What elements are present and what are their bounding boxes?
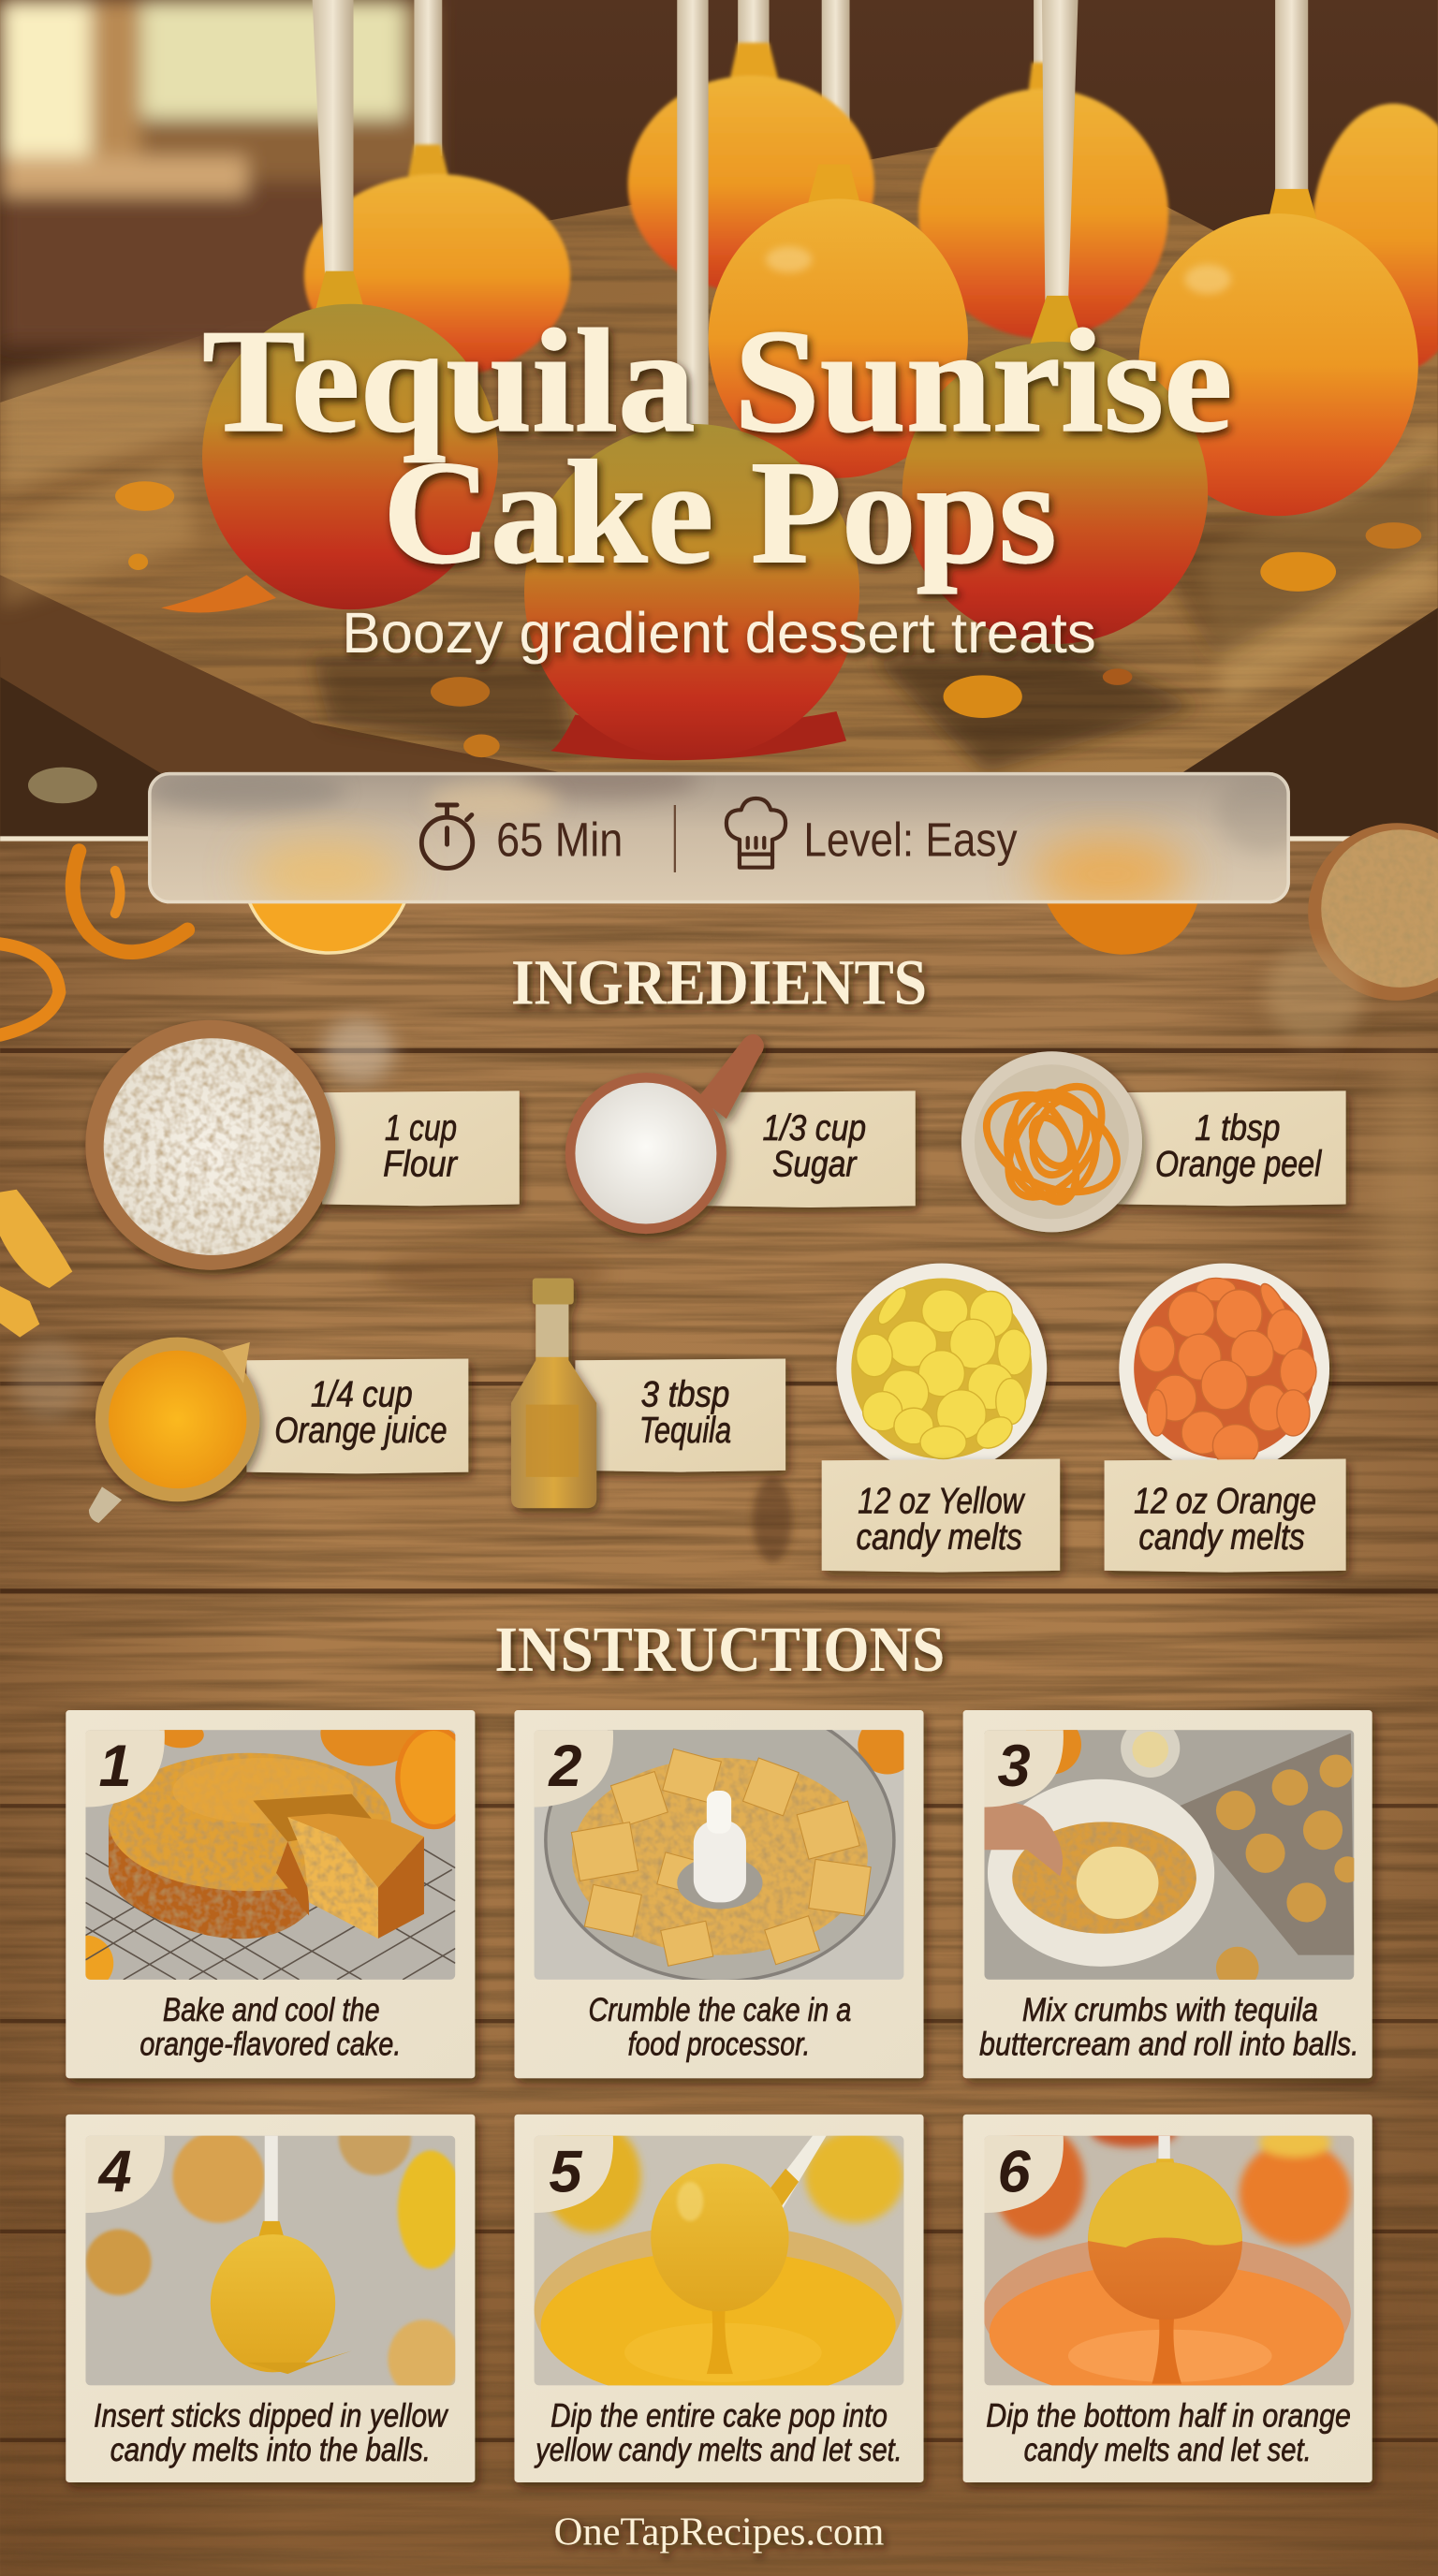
step 4 caption: Insert sticks dipped in yellow: [94, 2397, 449, 2434]
number badge 6: 6: [997, 2139, 1031, 2204]
step 2 photo: crumbs in food processor: [535, 1699, 917, 1982]
icon: tequila bottle: [511, 1278, 596, 1508]
icon: orange melts bowl: [1119, 1264, 1329, 1473]
step 1 caption: [139, 1992, 401, 2063]
step 6 caption: candy melts and let set.: [1024, 2432, 1312, 2468]
background sticks: [414, 0, 1308, 198]
number badge 5: [535, 2136, 613, 2213]
ingredient: flour: 1 cup: [385, 1108, 457, 1149]
number badge 1: [85, 1730, 165, 1808]
number badge 4: [85, 2136, 165, 2213]
step 5 photo: dip in yellow melts: [535, 2121, 903, 2402]
heading: instructions: INSTRUCTIONS: [494, 1614, 945, 1685]
ingredient: flour: Flour: [383, 1145, 459, 1185]
step 6 photo: dip in orange melts: [983, 2117, 1354, 2402]
wood table background: [0, 829, 1438, 2576]
step 3 caption: Mix crumbs with tequila: [1022, 1992, 1318, 2028]
icon: sugar scoop: [565, 1034, 764, 1234]
paper label: tequila: [575, 1358, 785, 1472]
number badge 2: 2: [548, 1734, 581, 1799]
ingredient: orange candy melts: candy melts: [1138, 1517, 1305, 1558]
step card 2: [514, 1699, 924, 2078]
step card 6: [963, 2115, 1372, 2482]
ingredient: orange juice: Orange juice: [274, 1411, 448, 1451]
number badge 6: [984, 2136, 1064, 2213]
step 6 caption: Dip the bottom half in orange: [986, 2397, 1351, 2434]
number badge 2: [535, 1730, 613, 1808]
ingredient: orange juice: [89, 1338, 468, 1523]
title: Cake Pops: [383, 431, 1057, 594]
footer website: OneTapRecipes.com: [554, 2510, 885, 2554]
ingredient: orange peel: Orange peel: [1155, 1145, 1322, 1185]
level label: Level: Easy: [803, 812, 1018, 866]
icon: chef hat: [726, 798, 785, 868]
ingredient: orange juice: 1/4 cup: [311, 1374, 413, 1414]
middle row cake pops: [709, 165, 1418, 516]
ingredient: tequila: 3 tbsp: [641, 1374, 729, 1414]
paper label: sugar: [707, 1090, 916, 1208]
back row cake pops: [304, 43, 1438, 378]
ingredient: flour: [85, 1020, 520, 1270]
icon: stopwatch: [421, 805, 473, 869]
orange garnishes and sugar bowl along top of table: [0, 823, 1438, 1419]
ingredient: orange peel: 1 tbsp: [1195, 1108, 1280, 1149]
step 5 caption: Dip the entire cake pop into: [550, 2397, 888, 2434]
paper label: yellow melts: [822, 1459, 1060, 1573]
paper label: orange melts: [1105, 1459, 1346, 1573]
number badge 5: 5: [549, 2139, 582, 2204]
ingredient: sugar: 1/3 cup: [763, 1108, 866, 1149]
background wall: [0, 0, 1438, 838]
paper label: orange juice: [246, 1358, 468, 1473]
syrup drops: [28, 481, 1421, 803]
ingredient: tequila: Tequila: [639, 1411, 731, 1451]
ingredient: tequila: [511, 1278, 785, 1508]
title: Tequila Sunrise: [202, 300, 1232, 463]
icon: flour bowl: [85, 1020, 335, 1270]
number badge 3: [984, 1730, 1064, 1808]
step card 4: [66, 2103, 475, 2482]
ingredient: sugar: Sugar: [772, 1145, 858, 1185]
step 3 photo: mixing crumbs and rolling balls: [984, 1715, 1360, 1989]
ingredient: orange candy melts: [1105, 1264, 1346, 1573]
time and level glass panel: [148, 761, 1314, 910]
heading: ingredients: INGREDIENTS: [511, 946, 927, 1017]
ingredient: orange peel: [961, 1051, 1346, 1232]
ground beneath board: [0, 600, 1438, 838]
step 1 caption: orange-flavored cake.: [139, 2027, 401, 2063]
front sticks: [313, 0, 1078, 435]
step card 1: [58, 1701, 475, 2078]
paper label: orange peel: [1118, 1090, 1346, 1206]
subtitle: Boozy gradient dessert treats: [342, 601, 1096, 666]
step 1 photo: baked cake on rack: [58, 1701, 470, 1991]
window: [0, 0, 435, 345]
step 5 caption: [535, 2397, 902, 2468]
step 4 caption: candy melts into the balls.: [110, 2432, 431, 2468]
icon: juice measuring cup: [89, 1338, 259, 1523]
number badge 4: 4: [96, 2139, 132, 2204]
step 3 caption: buttercream and roll into balls.: [979, 2027, 1359, 2063]
ingredient: yellow candy melts: candy melts: [857, 1517, 1022, 1558]
step 6 caption: [986, 2397, 1351, 2468]
front row cake pops: [161, 271, 1208, 760]
number badge 3: 3: [997, 1734, 1031, 1799]
step 4 caption: [94, 2397, 449, 2468]
step 2 caption: [588, 1992, 851, 2063]
cutting board: [0, 131, 1438, 788]
ingredient: yellow candy melts: 12 oz Yellow: [858, 1481, 1025, 1521]
step 2 caption: Crumble the cake in a: [588, 1992, 851, 2028]
ingredient: orange candy melts: 12 oz Orange: [1134, 1481, 1316, 1521]
step card 5: [514, 2115, 924, 2482]
paper label: flour: [322, 1090, 520, 1206]
time label: 65 Min: [496, 812, 623, 866]
icon: orange peel bowl: [961, 1051, 1142, 1232]
number badge 1: 1: [98, 1734, 132, 1799]
step card 3: [963, 1710, 1372, 2078]
ingredient: yellow candy melts: [822, 1264, 1060, 1573]
step 4 photo: insert sticks: [85, 2103, 463, 2398]
step 3 caption: [979, 1992, 1359, 2063]
title: [202, 300, 1232, 594]
ingredient: sugar: [565, 1034, 916, 1234]
step 2 caption: food processor.: [628, 2027, 810, 2063]
icon: yellow melts bowl: [836, 1264, 1047, 1473]
step 1 caption: Bake and cool the: [163, 1992, 380, 2028]
step 5 caption: yellow candy melts and let set.: [535, 2432, 902, 2468]
hero photo: cake pops on wooden board: [0, 0, 1438, 838]
divider line between hero and table: [0, 836, 1438, 842]
